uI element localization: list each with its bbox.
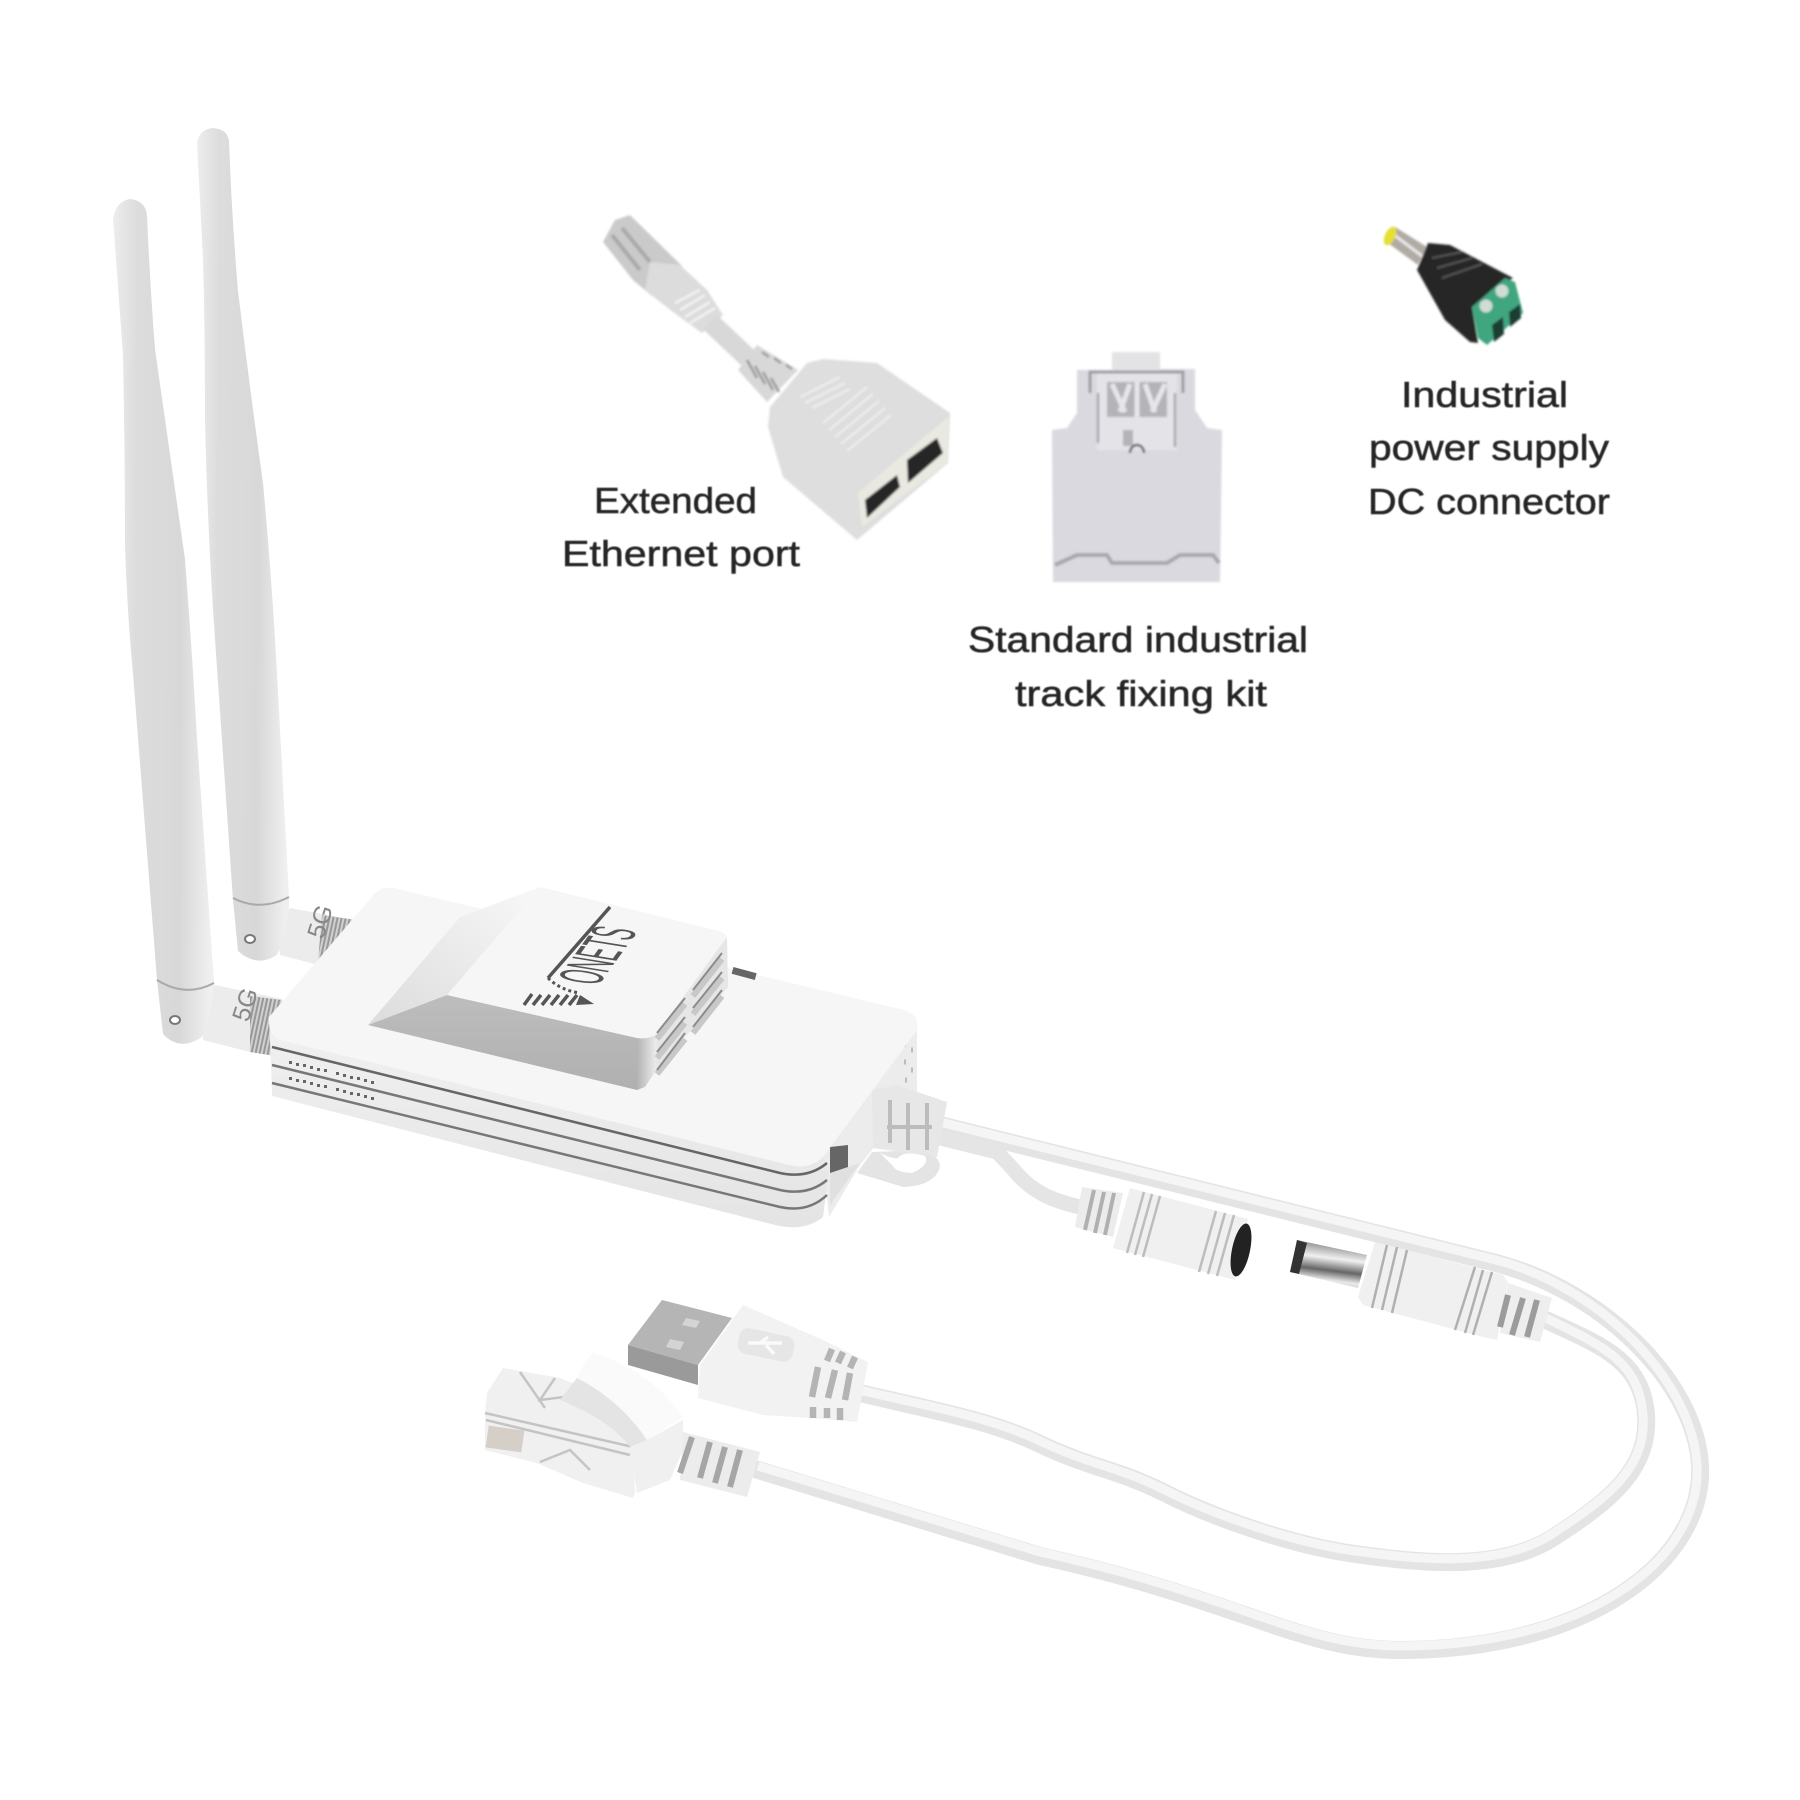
antenna: front — [113, 199, 282, 1056]
antenna: rear — [197, 128, 356, 968]
label: Industrial power supply DC connector — [1368, 374, 1610, 522]
accessory: DC terminal connector — [1381, 225, 1523, 345]
connector: RJ45 plug — [485, 1353, 760, 1498]
VONETS logo: ONETS — [544, 922, 651, 988]
antenna: rear: 5G — [302, 901, 339, 942]
connector: USB plug — [628, 1300, 868, 1422]
heat sink module — [368, 887, 728, 1090]
label: Extended Ethernet port: Ethernet port — [562, 533, 800, 574]
accessory: DIN rail kit — [1052, 352, 1222, 582]
device ventilation dots — [289, 1061, 374, 1100]
label: Industrial power supply DC connector: power supply — [1369, 427, 1609, 468]
label: Extended Ethernet port: Extended — [594, 480, 757, 521]
connector: DC female — [1075, 1187, 1255, 1280]
antenna: front: 5G — [227, 984, 264, 1025]
cable: ethernet lead — [758, 1122, 1700, 1650]
label: Standard industrial track fixing kit: track fixing kit — [1015, 673, 1267, 714]
label: Industrial power supply DC connector: Industrial — [1401, 374, 1568, 415]
label: Extended Ethernet port — [562, 480, 800, 574]
label: Industrial power supply DC connector: DC connector — [1368, 481, 1610, 522]
device side panel with cable clip — [823, 1030, 947, 1217]
USB symbol badge — [736, 1326, 796, 1364]
VONETS logo — [524, 907, 651, 1005]
cable: USB to DC lead — [860, 1318, 1646, 1562]
device LED — [732, 967, 757, 980]
label: Standard industrial track fixing kit — [968, 619, 1308, 714]
accessory: Ethernet splitter — [603, 215, 950, 540]
device top face — [269, 888, 917, 1166]
cable: short DC branch — [940, 1138, 1080, 1207]
label: Standard industrial track fixing kit: Standard industrial — [968, 619, 1308, 660]
device: main router body — [269, 887, 947, 1227]
connector: DC male — [1290, 1240, 1552, 1342]
device layered sides — [269, 1017, 829, 1227]
